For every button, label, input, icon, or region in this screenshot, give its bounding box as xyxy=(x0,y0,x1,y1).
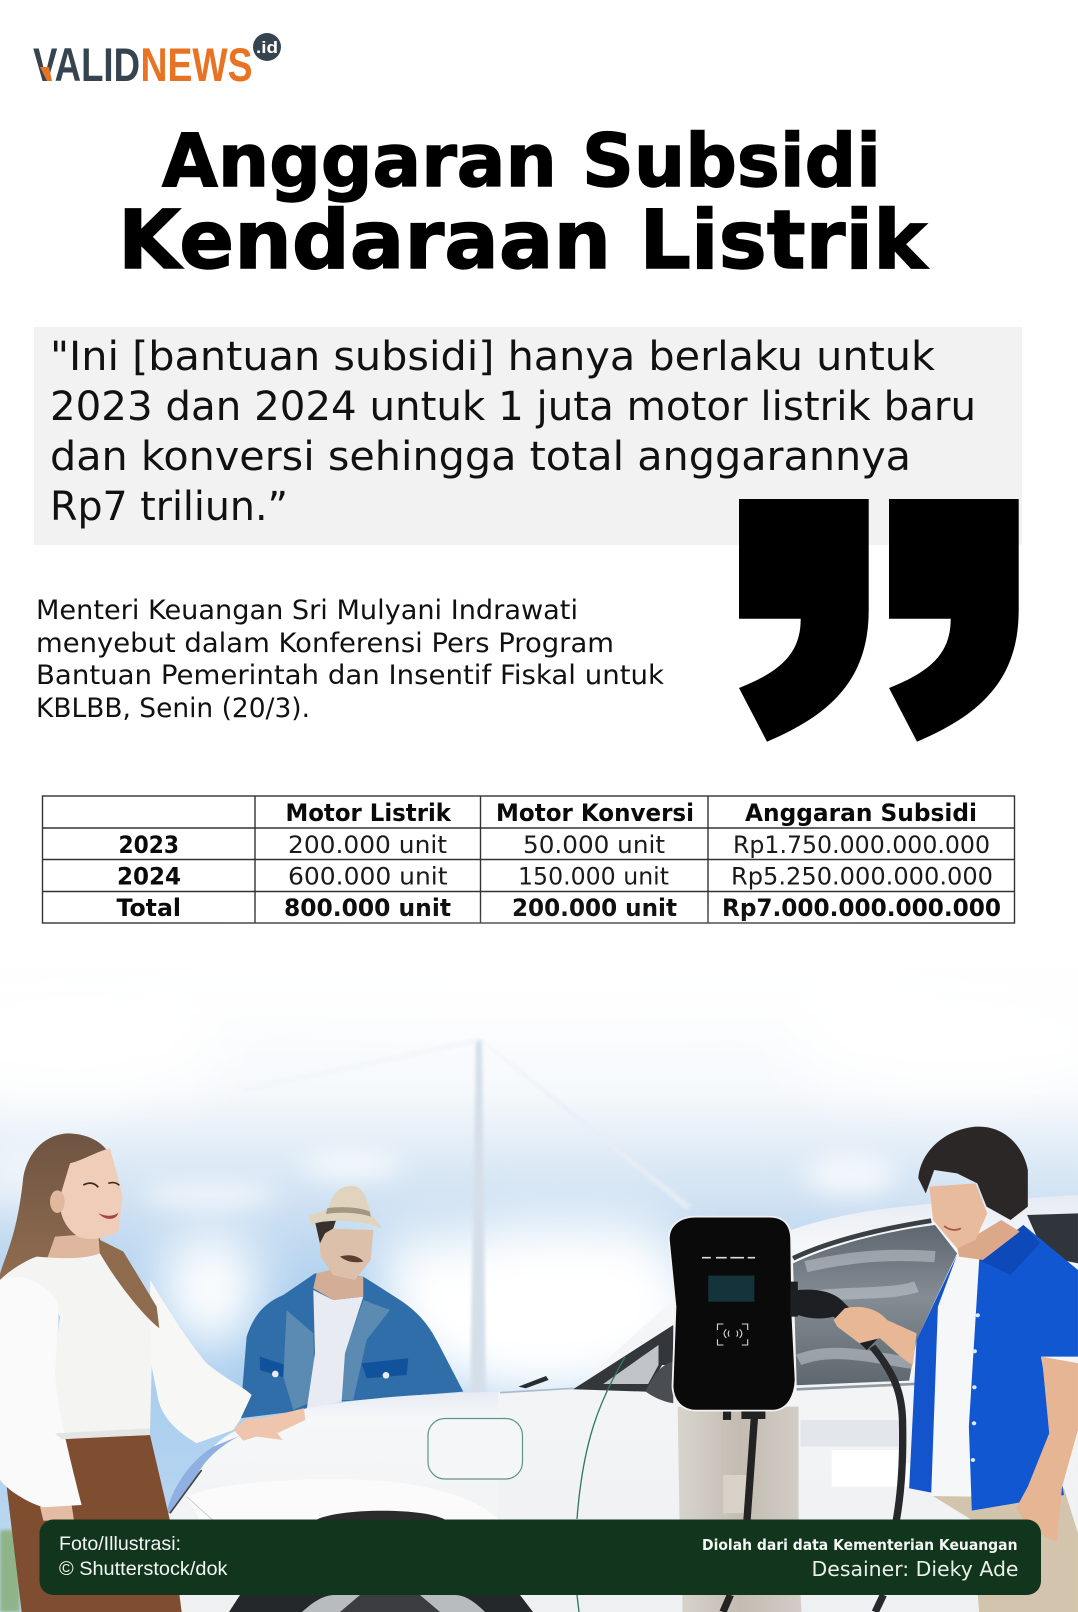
attribution text: Menteri Keuangan Sri Mulyani Indrawati xyxy=(36,595,578,626)
car side body with windows xyxy=(498,1195,1078,1612)
table header: Motor Konversi xyxy=(496,799,694,827)
row 2024 xyxy=(117,862,993,890)
attribution text: Bantuan Pemerintah dan Insentif Fiskal untuk xyxy=(36,660,664,691)
photo credit: Foto/Illustrasi: xyxy=(59,1533,181,1555)
EV charging station xyxy=(669,1217,903,1612)
row 2024: 600.000 unit xyxy=(288,862,448,890)
quote text: Rp7 triliun.” xyxy=(50,484,288,530)
car front fender xyxy=(167,1392,503,1612)
source and designer credit: Diolah dari data Kementerian Keuangan xyxy=(702,1536,1018,1554)
row 2023: Rp1.750.000.000.000 xyxy=(733,831,990,859)
attribution text xyxy=(36,595,664,724)
table header: Motor Listrik xyxy=(286,799,452,827)
charging plug and cable xyxy=(790,1282,903,1612)
row 2024: 150.000 unit xyxy=(518,862,669,890)
quote text: dan konversi sehingga total anggarannya xyxy=(50,434,911,480)
icon: closing quotation mark xyxy=(739,499,1019,742)
quote text: 2023 dan 2024 untuk 1 juta motor listrik baru xyxy=(50,384,976,430)
row total: Total xyxy=(116,894,181,922)
row total: Rp7.000.000.000.000 xyxy=(722,894,1001,922)
attribution text: KBLBB, Senin (20/3). xyxy=(36,693,310,724)
white car xyxy=(167,1195,1078,1612)
row total: 200.000 unit xyxy=(512,894,677,922)
row total xyxy=(116,894,1001,922)
row 2024: 2024 xyxy=(117,862,181,890)
logo: Validnews.id: VALID xyxy=(33,38,140,91)
table header: Anggaran Subsidi xyxy=(745,799,977,827)
man in denim jacket xyxy=(240,1186,463,1418)
credit bar xyxy=(40,1520,1041,1595)
charger indicator lights xyxy=(702,1255,755,1260)
row 2023: 50.000 unit xyxy=(523,831,665,859)
foliage xyxy=(0,1530,20,1612)
panel: quote xyxy=(34,327,1022,545)
logo: Validnews.id: .id xyxy=(256,38,278,57)
attribution text: menyebut dalam Konferensi Pers Program xyxy=(36,628,614,659)
photo credit: © Shutterstock/dok xyxy=(59,1558,228,1580)
quote text: "Ini [bantuan subsidi] hanya berlaku untuk xyxy=(50,334,936,380)
title: Kendaraan Listrik xyxy=(118,194,929,288)
charger cable down xyxy=(723,1418,754,1612)
panel: photo scene xyxy=(0,955,1078,1612)
row 2024: Rp5.250.000.000.000 xyxy=(731,862,993,890)
photo credit xyxy=(59,1533,228,1580)
title: Anggaran Subsidi xyxy=(162,119,881,204)
front wheel xyxy=(229,1595,533,1612)
row 2023 xyxy=(118,831,990,859)
woman in white blouse xyxy=(0,1133,305,1612)
title xyxy=(118,119,929,288)
car door seam xyxy=(577,1357,625,1612)
wind turbine xyxy=(243,1038,692,1395)
charger screen xyxy=(708,1276,754,1302)
charger body xyxy=(669,1217,796,1411)
table header xyxy=(286,799,977,827)
data table xyxy=(42,796,1014,923)
charger RFID reader xyxy=(717,1324,748,1345)
source and designer credit xyxy=(702,1536,1018,1581)
row total: 800.000 unit xyxy=(284,894,451,922)
row 2023: 2023 xyxy=(118,831,179,859)
logo: Validnews.id: NEWS xyxy=(140,38,252,91)
sky xyxy=(0,955,1078,1612)
charger post xyxy=(678,1407,802,1612)
row 2023: 200.000 unit xyxy=(288,831,447,859)
quote text xyxy=(50,334,976,530)
car charge port door xyxy=(428,1418,522,1479)
logo: Validnews.id xyxy=(33,33,281,91)
boy in blue shirt xyxy=(834,1127,1078,1612)
source and designer credit: Desainer: Dieky Ade xyxy=(812,1557,1018,1581)
